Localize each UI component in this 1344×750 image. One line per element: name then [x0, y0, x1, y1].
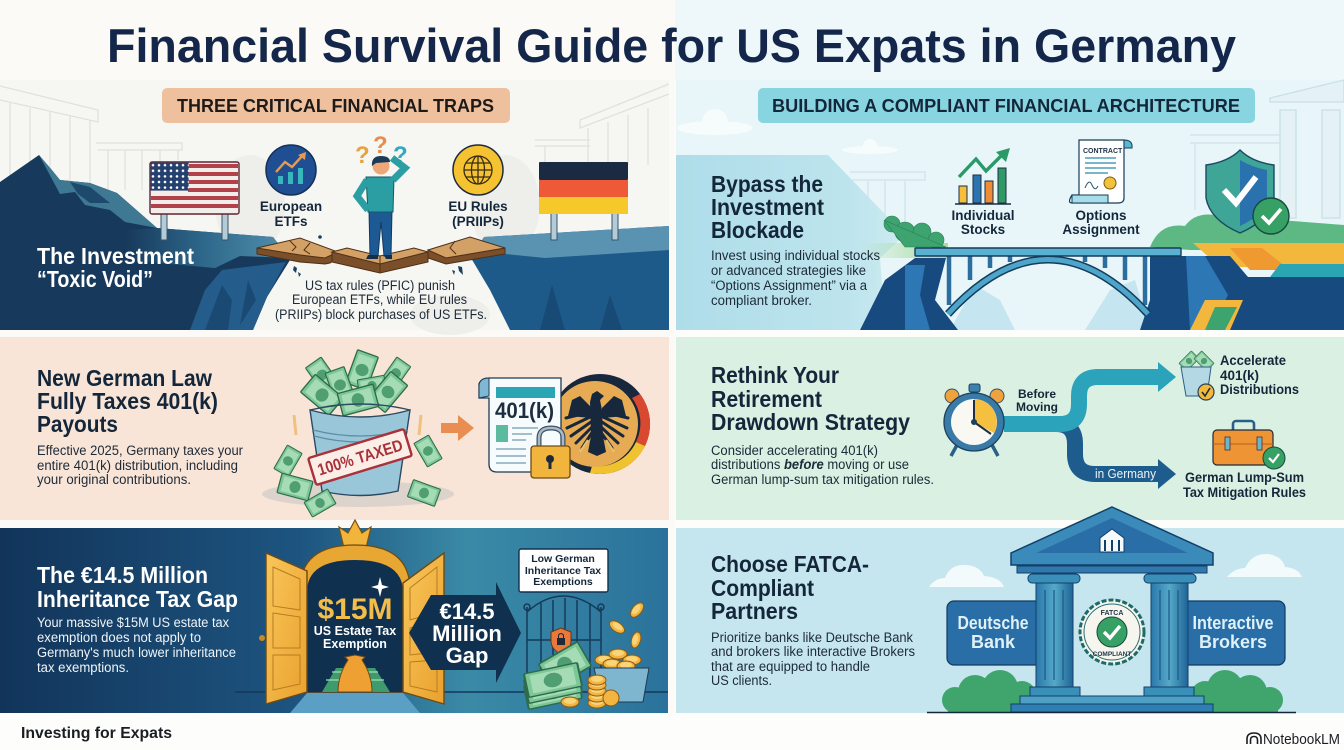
double arrow: 14.5 million gap: Gap — [446, 643, 488, 668]
label: options assignment: Assignment — [1062, 222, 1140, 237]
panel heading — [37, 243, 194, 292]
icon: alarm clock — [944, 384, 1004, 456]
icon: 401k document — [479, 378, 561, 472]
arrow — [441, 415, 474, 441]
panel: 401k tax — [0, 337, 669, 520]
panel description — [711, 443, 934, 487]
label: $15M exemption: $15M — [317, 593, 393, 626]
double arrow: 14.5 million gap: €14.5 — [439, 599, 495, 624]
panel: retirement drawdown — [676, 337, 1344, 520]
right cliff and terrain — [1140, 214, 1344, 330]
flow arrow: in Germany — [1056, 424, 1176, 489]
icon: money bucket: 100% TAXED — [316, 436, 405, 479]
icon: small money bucket — [1179, 351, 1214, 400]
panel heading — [711, 362, 910, 435]
right door — [403, 553, 444, 704]
panel heading: “Toxic Void” — [37, 266, 153, 292]
question marks: ? — [355, 142, 370, 169]
temple — [927, 507, 1296, 712]
panel description: exemption does not apply to — [37, 630, 201, 645]
panel description: Invest using individual stocks — [711, 248, 880, 263]
panel description — [37, 615, 236, 675]
floor — [290, 693, 420, 713]
label: EU Rules: (PRIIPs) — [452, 214, 504, 229]
label: before moving — [1016, 387, 1058, 414]
icon: german eagle emblem — [550, 374, 650, 474]
panel description: European ETFs, while EU rules — [292, 292, 467, 307]
question marks: ? — [373, 132, 388, 159]
icon: 401k document: 401(k) — [495, 398, 554, 423]
title: Financial Survival Guide for US Expats in Germany — [107, 19, 1236, 72]
panel description: US tax rules (PFIC) punish — [305, 278, 455, 293]
panel description — [275, 278, 487, 322]
section heading: traps — [162, 88, 510, 123]
label: low german exemptions: Exemptions — [533, 576, 593, 588]
bushes — [942, 670, 1283, 713]
seal: FATCA compliant: FATCA — [1101, 610, 1123, 617]
label: accelerate distributions: Distributions — [1220, 382, 1299, 397]
icon: coin stack — [561, 675, 619, 708]
footer: NotebookLM mark: NotebookLM — [1263, 732, 1340, 748]
panel heading: Investment — [711, 194, 824, 220]
panel description: tax exemptions. — [37, 660, 129, 675]
seal: FATCA compliant: COMPLIANT — [1093, 651, 1131, 658]
panel description: German lump-sum tax mitigation rules. — [711, 472, 934, 487]
question marks — [355, 132, 408, 169]
panel description: Effective 2025, Germany taxes your — [37, 443, 243, 458]
sign: Interactive Brokers — [1178, 601, 1285, 665]
label: low german exemptions: Inheritance Tax — [525, 565, 601, 577]
label: lump-sum rules: Tax Mitigation Rules — [1183, 485, 1306, 500]
icon: padlock — [531, 428, 570, 478]
panel heading: Payouts — [37, 411, 118, 437]
label: European ETFs: ETFs — [274, 214, 308, 229]
label: accelerate distributions: 401(k) — [1220, 368, 1259, 383]
panel description: Germany's much lower inheritance — [37, 645, 236, 660]
panel description: US clients. — [711, 673, 772, 688]
text block background — [676, 155, 905, 330]
bridge — [915, 248, 1181, 314]
figure: confused person — [357, 156, 405, 259]
panel heading: New German Law — [37, 365, 212, 391]
panel heading: The Investment — [37, 243, 194, 269]
panel heading: Fully Taxes 401(k) — [37, 388, 218, 414]
label: accelerate distributions: Accelerate — [1220, 353, 1286, 368]
icon: compliance shield — [1206, 150, 1289, 234]
sign: Deutsche Bank — [947, 601, 1047, 665]
panel heading: Choose FATCA- — [711, 551, 869, 577]
sign: Interactive Brokers: Brokers — [1199, 632, 1267, 652]
label: options assignment: Options — [1076, 208, 1126, 223]
label: before moving: Before — [1018, 387, 1056, 401]
label: before moving: Moving — [1016, 400, 1058, 414]
right cliff — [471, 226, 669, 330]
left door — [259, 553, 307, 704]
panel heading: Rethink Your — [711, 362, 839, 388]
panel heading — [711, 551, 869, 624]
question marks: ? — [393, 142, 408, 169]
golden archway — [300, 545, 410, 692]
panel heading: Retirement — [711, 386, 822, 412]
label: $15M exemption — [314, 593, 396, 651]
crown — [339, 520, 371, 548]
icon: lock shield — [551, 628, 571, 654]
US flag sign — [150, 162, 239, 240]
flow arrow: before moving — [1004, 362, 1176, 424]
panel heading — [37, 562, 238, 612]
panel heading: Bypass the — [711, 171, 823, 197]
panel description: Prioritize banks like Deutsche Bank — [711, 630, 913, 645]
panel description: entire 401(k) distribution, including — [37, 458, 238, 473]
panel description: or advanced strategies like — [711, 263, 866, 278]
footer: source label: Investing for Expats — [21, 725, 172, 742]
panel heading: Inheritance Tax Gap — [37, 586, 238, 612]
panel description — [711, 630, 915, 688]
sign: Interactive Brokers: Interactive — [1192, 613, 1274, 633]
panel heading: Partners — [711, 598, 798, 624]
icon: cash stacks — [524, 642, 591, 709]
panel description: compliant broker. — [711, 293, 812, 308]
label: low german exemptions — [519, 549, 608, 592]
valley hills — [950, 280, 1150, 330]
icon: contract scroll: CONTRACT — [1083, 148, 1123, 155]
panel: bypass blockade — [676, 80, 1344, 330]
label: European ETFs: European — [260, 199, 322, 214]
icon: EU rules globe — [453, 145, 503, 195]
broken plank bridge — [257, 237, 505, 273]
left cliff and bush — [860, 216, 958, 330]
label: $15M exemption: Exemption — [323, 637, 387, 651]
panel description: Consider accelerating 401(k) — [711, 443, 878, 458]
German flag sign — [539, 162, 628, 240]
label: options assignment — [1062, 208, 1140, 237]
panel description: that are equipped to handle — [711, 659, 870, 674]
panel heading: The €14.5 Million — [37, 562, 208, 588]
icon: stocks chart — [955, 148, 1011, 204]
panel description: “Options Assignment” via a — [711, 278, 867, 293]
icon: coin basket — [594, 600, 649, 702]
label: accelerate distributions — [1220, 353, 1299, 397]
panel heading — [37, 365, 218, 437]
left cliff — [0, 155, 290, 330]
sign: Deutsche Bank: Deutsche — [958, 613, 1028, 633]
panel description — [711, 248, 880, 308]
section heading: architecture — [758, 88, 1255, 123]
flow arrow: in Germany: in Germany — [1095, 466, 1156, 481]
panel heading: Drawdown Strategy — [711, 409, 910, 435]
panel description: (PRIIPs) block purchases of US ETFs. — [275, 307, 487, 322]
label: lump-sum rules — [1183, 470, 1306, 500]
clouds — [929, 554, 1302, 587]
panel description — [37, 443, 243, 487]
seal: FATCA compliant — [1080, 600, 1144, 664]
building — [1270, 80, 1344, 218]
label: lump-sum rules: German Lump-Sum — [1185, 470, 1304, 485]
icon: iron gate — [524, 596, 604, 692]
label: individual stocks: Individual — [951, 208, 1015, 223]
label: individual stocks: Stocks — [961, 222, 1005, 237]
panel heading: Compliant — [711, 575, 814, 601]
panel: investment toxic void — [0, 80, 669, 335]
label: individual stocks — [951, 208, 1015, 237]
panel description: and brokers like interactive Brokers — [711, 644, 915, 659]
double arrow: 14.5 million gap — [409, 582, 521, 683]
label: $15M exemption: US Estate Tax — [314, 624, 396, 638]
label: EU Rules: EU Rules — [448, 199, 508, 214]
panel: FATCA partners — [676, 507, 1344, 713]
debris — [293, 235, 463, 277]
icon: contract scroll — [1070, 140, 1132, 203]
double arrow: 14.5 million gap: Million — [432, 621, 502, 646]
panel: inheritance tax gap — [0, 520, 668, 713]
panel description: your original contributions. — [37, 472, 191, 487]
panel heading — [711, 171, 824, 243]
panel description: distributions before moving or use — [711, 457, 909, 472]
sign: Deutsche Bank: Bank — [971, 632, 1016, 652]
icon: briefcase — [1213, 421, 1285, 469]
icon: European ETFs chart — [266, 145, 316, 195]
label: European ETFs — [260, 199, 322, 229]
label: low german exemptions: Low German — [531, 553, 595, 565]
section heading: architecture: BUILDING A COMPLIANT FINANCIAL ARCHITECTURE — [772, 96, 1240, 116]
icon: money bag — [322, 655, 390, 692]
section heading: traps: THREE CRITICAL FINANCIAL TRAPS — [177, 96, 494, 116]
label: EU Rules — [448, 199, 508, 229]
panel description: Your massive $15M US estate tax — [37, 615, 229, 630]
icon: money bucket — [262, 350, 454, 517]
panel heading: Blockade — [711, 217, 804, 243]
